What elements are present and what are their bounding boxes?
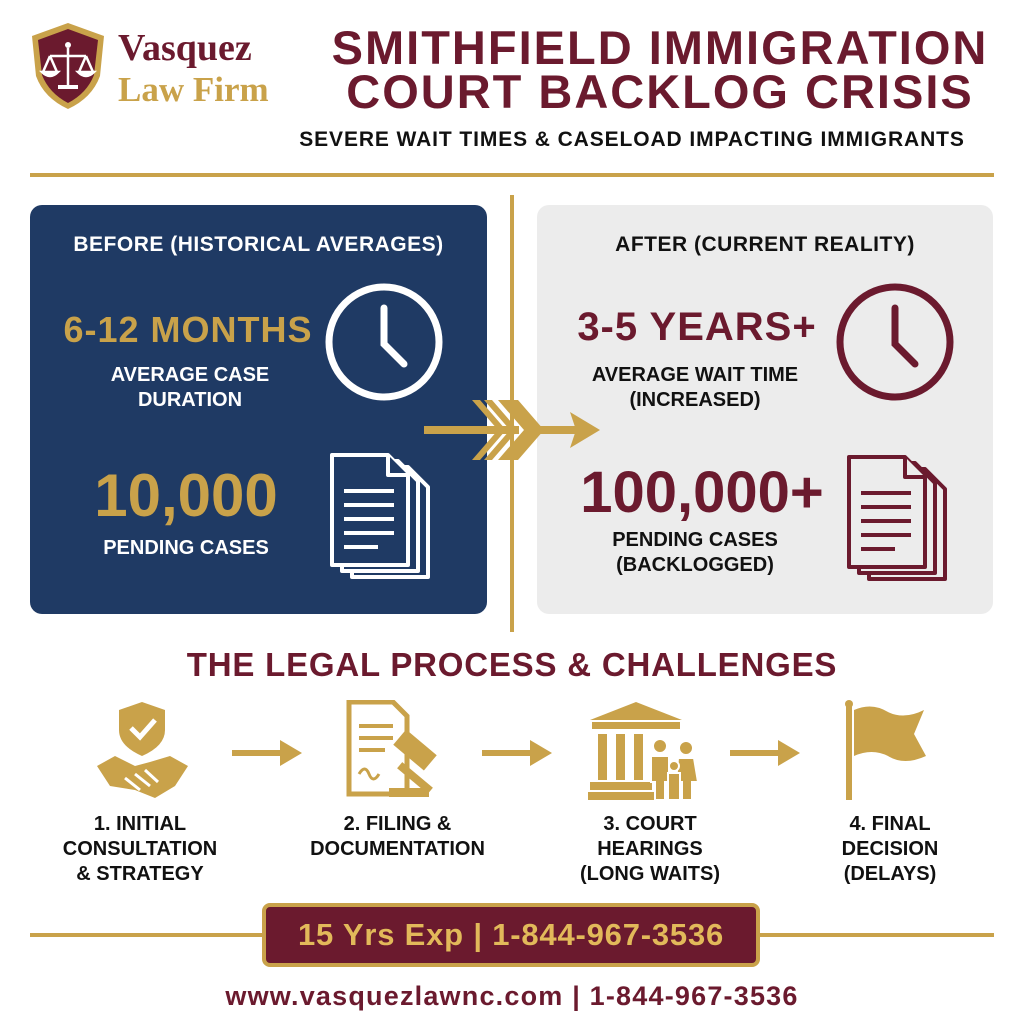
arrow 1 (232, 740, 302, 766)
label: average case duration: AVERAGE CASE (111, 364, 269, 386)
stat: 3-5 years: 3-5 YEARS+ (577, 305, 817, 349)
label step 1: & STRATEGY (76, 863, 204, 885)
icon: documents maroon (847, 455, 947, 581)
label step 4: (DELAYS) (844, 863, 936, 885)
before heading: BEFORE (HISTORICAL AVERAGES) (73, 233, 444, 256)
label: pending backlogged: PENDING CASES (612, 529, 778, 551)
label step 3: 3. COURT (603, 813, 697, 835)
icon: documents (330, 453, 430, 579)
icon: shield handshake (97, 702, 188, 798)
after heading: AFTER (CURRENT REALITY) (615, 233, 915, 256)
label: average wait time: (INCREASED) (629, 389, 761, 411)
title: SMITHFIELD IMMIGRATION (332, 21, 988, 74)
step 2 (310, 700, 485, 860)
step 3 (580, 702, 720, 885)
label step 4 (842, 813, 938, 885)
label step 1: CONSULTATION (63, 838, 217, 860)
label: average case duration: DURATION (138, 389, 242, 411)
icon: clock maroon (836, 284, 954, 400)
title: COURT BACKLOG CRISIS (346, 65, 974, 118)
cta button (262, 903, 760, 967)
stat: 6-12 months: 6-12 MONTHS (63, 309, 313, 350)
label step 1 (63, 813, 217, 885)
panel: before (30, 205, 487, 614)
title (332, 21, 988, 118)
subtitle: SEVERE WAIT TIMES & CASELOAD IMPACTING IMMIGRANTS (299, 128, 965, 151)
arrow 3 (730, 740, 800, 766)
label step 4: 4. FINAL (849, 813, 931, 835)
label step 3 (580, 813, 720, 885)
step 4 (842, 700, 938, 885)
label step 4: DECISION (842, 838, 938, 860)
panel: after (537, 205, 993, 614)
label step 3: (LONG WAITS) (580, 863, 720, 885)
logo text: Vasquez (118, 27, 252, 69)
icon: courthouse with family (588, 702, 697, 800)
label: pending cases: PENDING CASES (103, 537, 269, 559)
stat: 100,000+: 100,000+ (580, 460, 824, 525)
label step 2: DOCUMENTATION (310, 838, 485, 860)
step 1 (63, 702, 217, 885)
stat: 10,000: 10,000 (94, 462, 278, 529)
logo: Law Firm (118, 70, 269, 109)
icon: flag (845, 700, 926, 800)
footer contact: www.vasquezlawnc.com | 1-844-967-3536 (225, 981, 799, 1011)
label: average wait time: AVERAGE WAIT TIME (592, 364, 798, 386)
label: average case duration (111, 364, 269, 411)
section heading: THE LEGAL PROCESS & CHALLENGES (187, 646, 837, 683)
label step 3: HEARINGS (597, 838, 703, 860)
label: average wait time (592, 364, 798, 411)
label: pending backlogged (612, 529, 778, 576)
cta button: 15 Yrs Exp | 1-844-967-3536 (298, 917, 724, 952)
label step 2 (310, 813, 485, 860)
label step 2: 2. FILING & (344, 813, 451, 835)
icon: document with gavel (346, 700, 437, 797)
logo (32, 23, 269, 109)
arrow 2 (482, 740, 552, 766)
label: pending backlogged: (BACKLOGGED) (616, 554, 774, 576)
icon: shield with scales (32, 23, 104, 109)
label step 1: 1. INITIAL (94, 813, 186, 835)
arrow: before to after (424, 400, 600, 460)
icon: clock (326, 284, 442, 400)
